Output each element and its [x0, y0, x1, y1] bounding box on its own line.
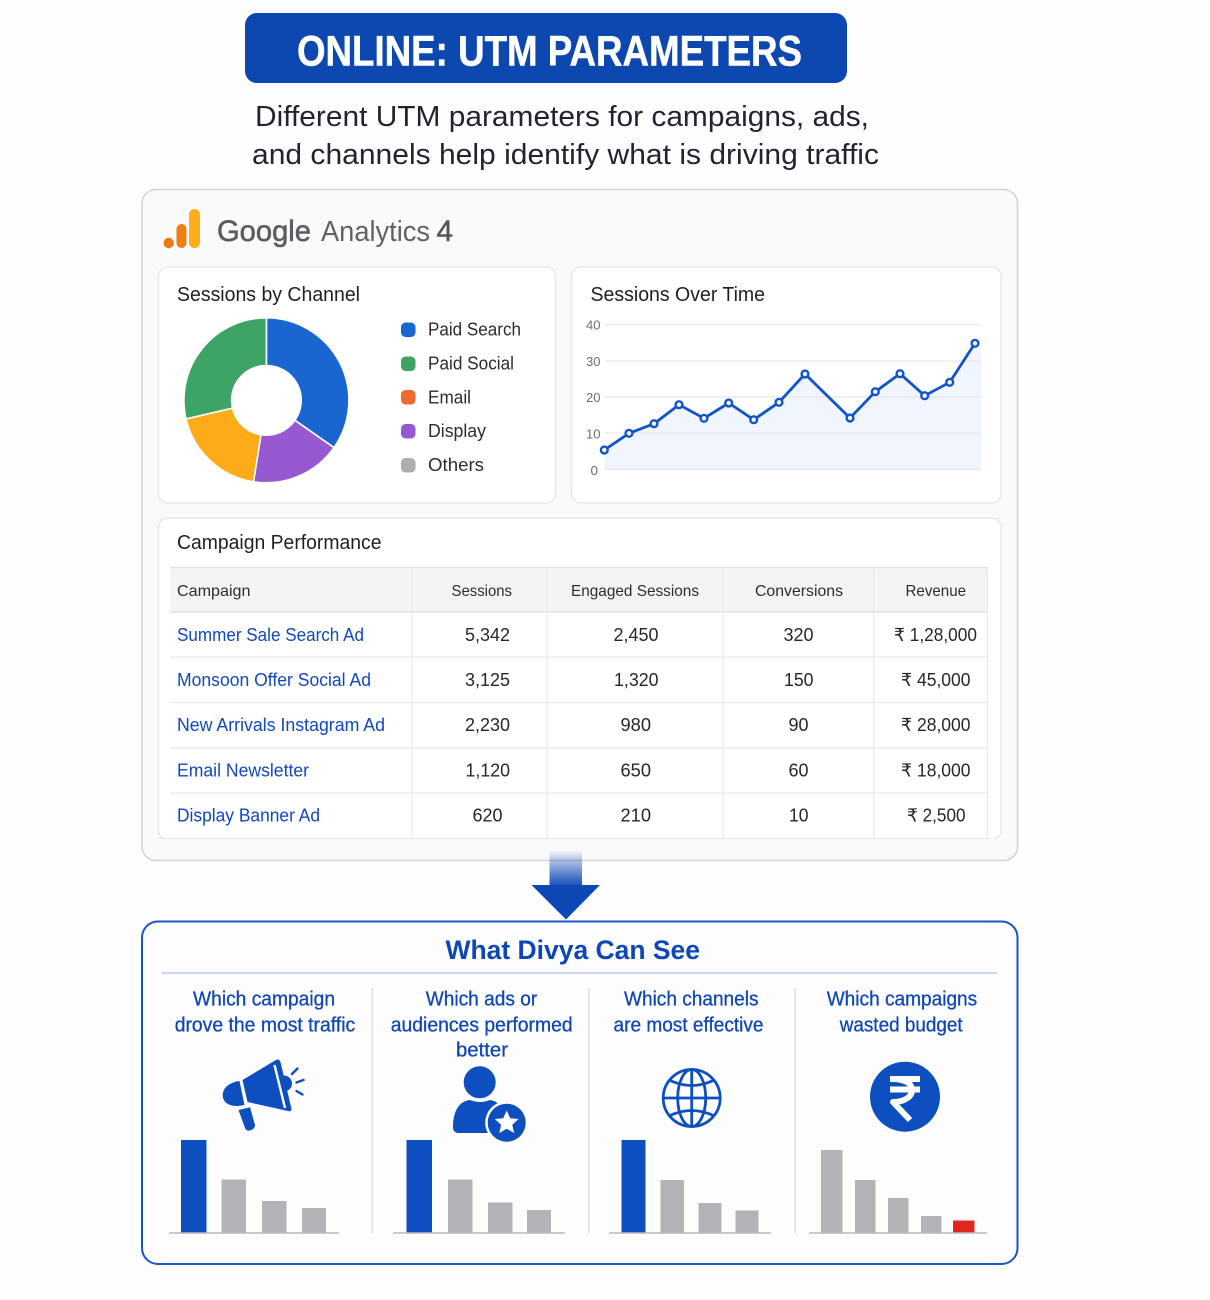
row: Summer Sale Search Ad: 320 — [784, 625, 814, 645]
bar chart: audiences — [393, 1140, 565, 1233]
heading: sessions by channel: Sessions by Channel — [177, 284, 360, 306]
row: New Arrivals Instagram Ad: 90 — [788, 715, 808, 735]
row: Display Banner Ad: 210 — [620, 806, 651, 826]
row: Summer Sale Search Ad: ₹ 1,28,000 — [894, 625, 977, 645]
table header: Campaign — [177, 583, 250, 600]
row: Summer Sale Search Ad: Summer Sale Search Ad — [177, 625, 364, 645]
line chart: 20 — [586, 390, 600, 405]
panel: campaign performance — [158, 518, 1001, 838]
icon: analytics logo — [164, 209, 200, 248]
row: Summer Sale Search Ad: 2,450 — [614, 625, 658, 645]
row: New Arrivals Instagram Ad: 2,230 — [465, 715, 510, 735]
heading: sessions over time: Sessions Over Time — [590, 284, 765, 306]
column: wasted budget — [809, 988, 987, 1233]
heading: Google Analytics 4: Google — [217, 215, 311, 248]
column: most traffic — [169, 988, 355, 1233]
table header: Revenue — [906, 583, 966, 600]
column: channels — [609, 988, 771, 1233]
text: which campaign: Which campaign — [193, 988, 335, 1010]
column: ads or audiences — [391, 988, 573, 1233]
line chart: 40 — [586, 318, 600, 332]
legend: Display — [428, 421, 486, 441]
table — [158, 568, 990, 838]
panel: Google Analytics 4 dashboard — [142, 190, 1018, 860]
legend: Paid Social — [428, 354, 514, 374]
row: New Arrivals Instagram Ad — [177, 715, 970, 735]
bar chart: budget — [809, 1150, 987, 1233]
text: which ads — [391, 988, 573, 1062]
row: Display Banner Ad — [177, 806, 966, 826]
row: Display Banner Ad: Display Banner Ad — [177, 806, 320, 826]
row: Email Newsletter: 650 — [620, 760, 651, 780]
bar chart: traffic — [169, 1140, 339, 1233]
row: Monsoon Offer Social Ad: 150 — [784, 670, 814, 690]
table header: Sessions — [452, 583, 512, 600]
legend: Email — [428, 387, 471, 407]
row: Monsoon Offer Social Ad: 1,320 — [614, 670, 658, 690]
text: which ads: Which ads or — [426, 988, 538, 1010]
text: which campaign: drove the most traffic — [175, 1014, 355, 1036]
line chart: 10 — [586, 426, 600, 442]
row: Summer Sale Search Ad — [177, 625, 977, 645]
row: Email Newsletter: ₹ 18,000 — [901, 760, 970, 780]
text: which campaigns — [827, 988, 977, 1036]
subtitle — [252, 101, 879, 171]
panel: What Divya Can See — [142, 922, 1018, 1264]
row: New Arrivals Instagram Ad: 980 — [620, 715, 651, 735]
title — [245, 13, 847, 83]
row: Email Newsletter: Email Newsletter — [177, 760, 309, 780]
row: Monsoon Offer Social Ad: Monsoon Offer Social Ad — [177, 670, 371, 690]
text: which campaigns: Which campaigns — [827, 988, 977, 1010]
text: which channels — [614, 988, 764, 1036]
line chart — [586, 318, 981, 478]
table header — [170, 568, 988, 612]
icon: megaphone — [223, 1060, 304, 1131]
bar chart: channels — [609, 1140, 771, 1233]
text: which ads: better — [456, 1040, 508, 1062]
line chart: 30 — [586, 354, 600, 369]
panel: sessions by channel — [158, 267, 556, 503]
donut chart — [184, 318, 349, 483]
row: Display Banner Ad: 620 — [472, 806, 502, 826]
row: New Arrivals Instagram Ad: New Arrivals Instagram Ad — [177, 715, 385, 735]
row: Email Newsletter: 1,120 — [466, 760, 510, 780]
heading: Google Analytics 4: 4 — [436, 215, 453, 248]
row: Display Banner Ad: ₹ 2,500 — [907, 806, 966, 826]
legend: Others — [428, 455, 484, 475]
arrow: down to insights — [532, 851, 600, 920]
panel: sessions over time — [572, 267, 1001, 503]
row: Summer Sale Search Ad: 5,342 — [465, 625, 510, 645]
text: which channels: are most effective — [614, 1014, 764, 1036]
legend — [401, 320, 521, 475]
row: Monsoon Offer Social Ad: ₹ 45,000 — [901, 670, 970, 690]
row: Monsoon Offer Social Ad: 3,125 — [465, 670, 510, 690]
text: which campaign — [175, 988, 355, 1036]
row: Email Newsletter — [177, 760, 970, 780]
heading: campaign performance: Campaign Performance — [177, 532, 382, 554]
legend: Paid Search — [428, 320, 521, 340]
line chart: 0 — [590, 463, 598, 478]
subtitle: and channels help identify what is driving traffic — [252, 139, 879, 171]
text: which channels: Which channels — [624, 988, 758, 1010]
icon: globe — [663, 1070, 720, 1126]
heading: Google Analytics 4: Analytics — [321, 216, 430, 248]
row: Monsoon Offer Social Ad — [177, 670, 970, 690]
row: Email Newsletter: 60 — [788, 760, 808, 780]
table header: Conversions — [755, 583, 843, 600]
heading: Google Analytics 4 — [217, 215, 453, 248]
subtitle: Different UTM parameters for campaigns, ads, — [255, 101, 869, 133]
row: Display Banner Ad: 10 — [789, 806, 808, 826]
icon: person with star — [453, 1066, 528, 1144]
row: New Arrivals Instagram Ad: ₹ 28,000 — [901, 715, 970, 735]
table header: Engaged Sessions — [571, 583, 699, 600]
heading: What Divya Can See: What Divya Can See — [446, 935, 700, 965]
text: which campaigns: wasted budget — [839, 1014, 963, 1036]
text: which ads: audiences performed — [391, 1014, 573, 1036]
icon: rupee coin — [870, 1062, 940, 1132]
title: ONLINE: UTM PARAMETERS — [297, 28, 802, 76]
